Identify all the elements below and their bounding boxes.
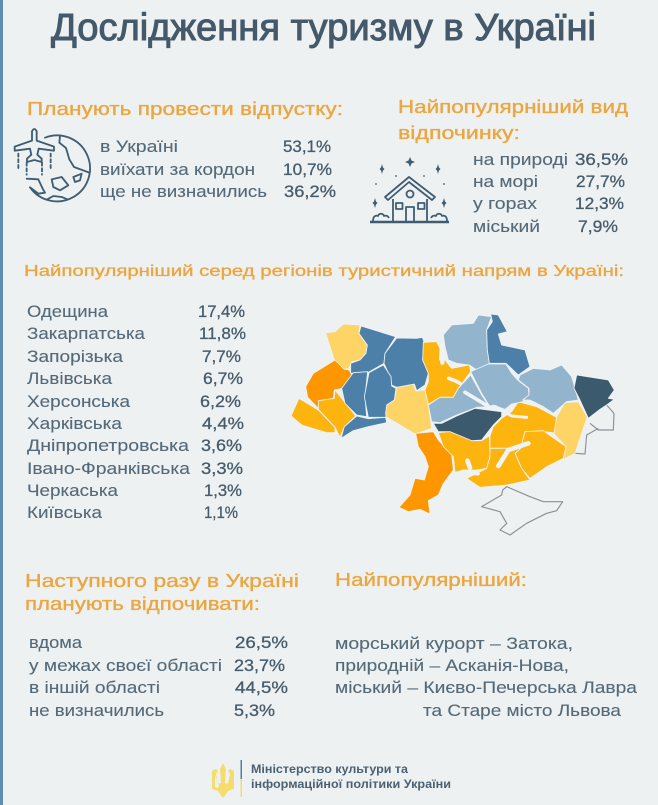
row: mountains [473, 194, 624, 213]
row: nature: на природі [473, 150, 568, 169]
row: abroad: 10,7% [283, 160, 332, 179]
row: Zakarpattia: 11,8% [199, 324, 246, 343]
row: Zakarpattia: Закарпатська [27, 324, 146, 343]
row: Kyiv [27, 503, 238, 522]
title: Дослідження туризму в Україні [51, 7, 596, 49]
text block: most popular places: природній – Асканія-Нова, [335, 656, 569, 675]
row: Lviv [27, 369, 243, 388]
row: mountains: у горах [473, 194, 538, 213]
row: city [473, 217, 618, 236]
heading: most popular: Найпопулярніший: [335, 570, 527, 590]
row: Ivano-Frankivsk: Івано-Франківська [27, 459, 191, 478]
row: Lviv: Львівська [27, 369, 113, 388]
row: Cherkasy: Черкаська [27, 481, 119, 500]
heading: next holiday: планують відпочивати: [25, 594, 260, 614]
row: at home: 26,5% [235, 633, 288, 652]
row: undecided: 5,3% [234, 701, 275, 720]
panel: next holiday [25, 571, 299, 720]
icon: globe and plane [15, 129, 90, 201]
row: other region [29, 678, 288, 697]
row: Kharkiv [27, 414, 244, 433]
heading: regions: Найпопулярніший серед регіонів туристичний напрям в Україні: [24, 263, 624, 280]
row: Zaporizhzhia: 7,7% [202, 347, 241, 366]
row: sea: 27,7% [576, 172, 625, 191]
row: other region: 44,5% [235, 678, 288, 697]
map of Ukraine [291, 314, 614, 535]
row: Cherkasy [27, 481, 242, 500]
icon: house [370, 157, 449, 222]
row: at home: вдома [29, 633, 83, 652]
text block: most popular places: морський курорт – Затока, [335, 634, 573, 653]
heading: vacation type [398, 97, 629, 143]
row: Dnipropetrovsk: Дніпропетровська [27, 436, 190, 455]
row: in Ukraine: в Україні [100, 137, 178, 156]
row: city: 7,9% [578, 217, 618, 236]
row: undecided: 36,2% [284, 182, 336, 201]
text: ministry name: інформаційної політики України [251, 779, 451, 791]
row: Ivano-Frankivsk [27, 459, 243, 478]
panel: most popular [335, 570, 638, 720]
row: undecided [29, 701, 275, 720]
heading: next holiday: Наступного разу в Україні [25, 571, 299, 591]
row: Zakarpattia [27, 324, 246, 343]
row: in Ukraine [100, 137, 331, 156]
row: own region [29, 656, 285, 675]
row: Ivano-Frankivsk: 3,3% [201, 459, 243, 478]
text block: most popular places [335, 634, 638, 720]
row: Odesa [27, 302, 245, 321]
row: Odesa: 17,4% [198, 302, 245, 321]
row: Zaporizhzhia [27, 347, 241, 366]
row: undecided: ще не визначились [100, 182, 267, 201]
row: nature: 36,5% [575, 150, 628, 169]
text: ministry name [251, 764, 451, 791]
row: Dnipropetrovsk [27, 436, 242, 455]
row: sea [473, 172, 625, 191]
row: abroad: виїхати за кордон [100, 160, 255, 179]
row: undecided: не визначились [29, 701, 164, 720]
row: other region: в іншій області [29, 678, 160, 697]
text block: most popular places: міський – Києво-Печерська Лавра [335, 678, 638, 697]
row: Odesa: Одещина [27, 302, 109, 321]
panel: vacation type [370, 97, 629, 236]
row: undecided [100, 182, 336, 201]
row: Kharkiv: 4,4% [202, 414, 244, 433]
row: at home [29, 633, 288, 652]
heading: vacation type: відпочинку: [398, 123, 520, 143]
panel: regions list [27, 302, 246, 522]
panel: vacation plans [15, 99, 343, 201]
heading: next holiday [25, 571, 299, 614]
row: Cherkasy: 1,3% [204, 481, 242, 500]
row: Kherson: Херсонська [27, 392, 131, 411]
row: Kherson [27, 392, 241, 411]
text block: most popular places: та Старе місто Львова [423, 701, 622, 720]
row: Zaporizhzhia: Запорізька [27, 347, 124, 366]
row: sea: на морі [473, 172, 538, 191]
row: Kherson: 6,2% [200, 392, 241, 411]
heading: vacation plans: Планують провести відпустку: [27, 99, 343, 119]
row: in Ukraine: 53,1% [283, 137, 331, 156]
footer: ministry logo [212, 760, 451, 798]
heading: vacation type: Найпопулярніший вид [398, 97, 629, 117]
row: Kyiv: 1,1% [204, 503, 238, 522]
row: city: міський [473, 217, 540, 236]
divider: blue and yellow [240, 760, 242, 797]
row: Kyiv: Київська [27, 503, 103, 522]
icon: trident [212, 763, 234, 798]
text: ministry name: Міністерство культури та [251, 764, 409, 776]
row: Lviv: 6,7% [203, 369, 243, 388]
row: own region: у межах своєї області [29, 656, 222, 675]
row: mountains: 12,3% [575, 194, 624, 213]
row: own region: 23,7% [234, 656, 285, 675]
row: Kharkiv: Харківська [27, 414, 123, 433]
row: nature [473, 150, 628, 169]
row: abroad [100, 160, 332, 179]
row: Dnipropetrovsk: 3,6% [201, 436, 242, 455]
